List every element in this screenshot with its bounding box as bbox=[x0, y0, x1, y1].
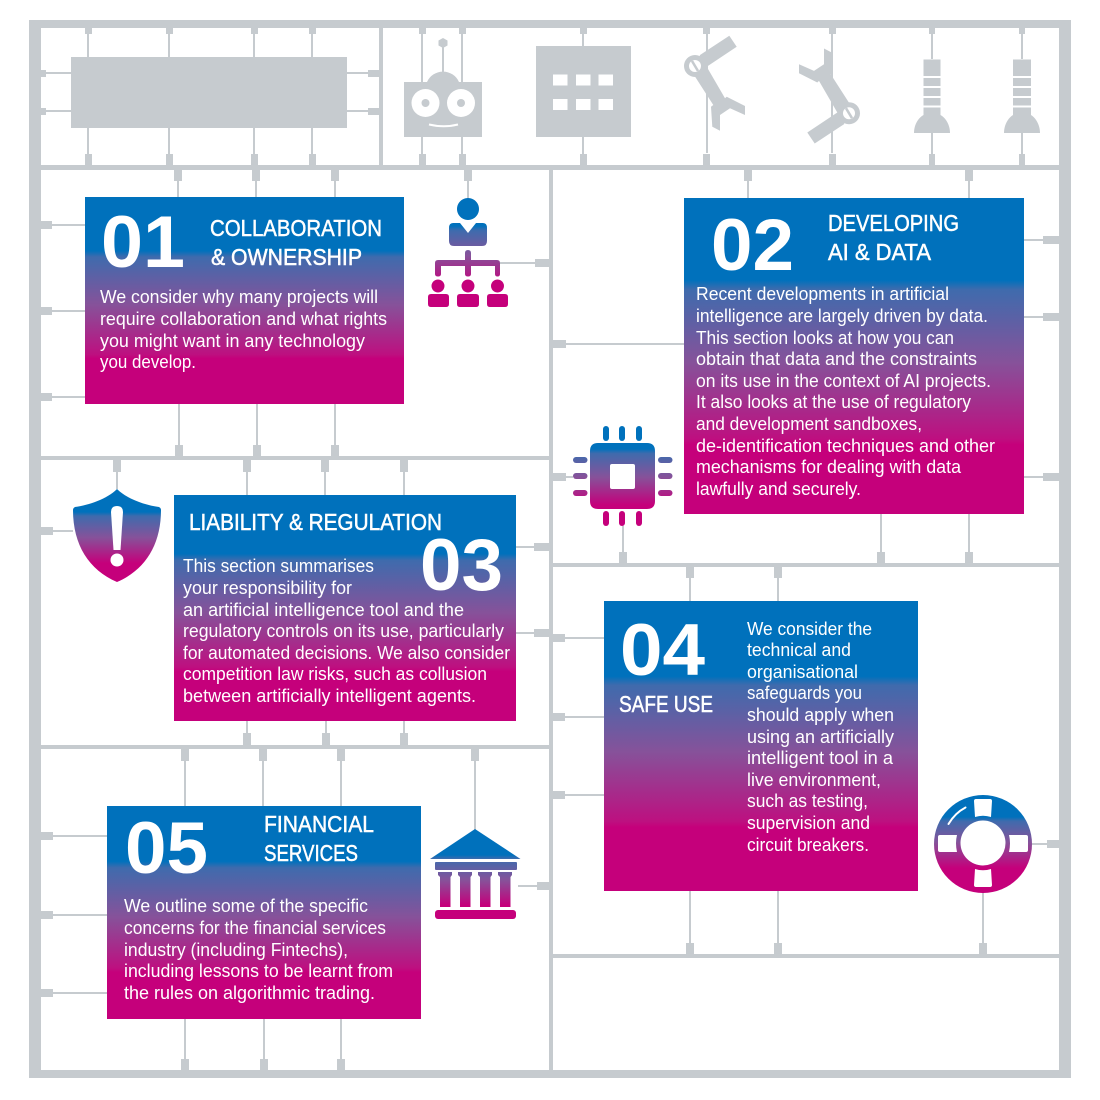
kit part: robot head bbox=[404, 38, 482, 137]
heading 05 bbox=[264, 811, 374, 866]
body text 04 bbox=[747, 619, 894, 855]
body text 02: lawfully and securely. bbox=[696, 479, 861, 499]
body text 03: for automated decisions. We also consider bbox=[183, 643, 510, 663]
body text 01: require collaboration and what rights bbox=[100, 309, 387, 329]
panel: 02 developing AI and data bbox=[684, 198, 1024, 514]
body text 04: organisational bbox=[747, 662, 858, 682]
kit part: robot arm right bbox=[799, 48, 860, 144]
body text 02: mechanisms for dealing with data bbox=[696, 457, 962, 477]
icon: organisation chart bbox=[428, 198, 508, 307]
heading 04: SAFE USE bbox=[619, 691, 713, 717]
heading 01: & OWNERSHIP bbox=[211, 244, 362, 270]
body text 04: supervision and bbox=[747, 813, 870, 833]
body text 04: circuit breakers. bbox=[747, 835, 869, 855]
number 05: 05 bbox=[125, 808, 208, 889]
body text 03: This section summarises bbox=[183, 556, 374, 576]
body text 03: an artificial intelligence tool and the bbox=[183, 600, 464, 620]
icon: lifebuoy bbox=[934, 795, 1032, 893]
body text 04: such as testing, bbox=[747, 791, 868, 811]
body text 04: live environment, bbox=[747, 770, 881, 790]
body text 05: concerns for the financial services bbox=[124, 918, 386, 938]
body text 01: you might want in any technology bbox=[100, 331, 365, 351]
body text 02: de-identification techniques and other bbox=[696, 436, 995, 456]
body text 02: obtain that data and the constraints bbox=[696, 349, 977, 369]
body text 03: your responsibility for bbox=[183, 578, 352, 598]
body text 01 bbox=[100, 287, 387, 372]
body text 04: safeguards you bbox=[747, 683, 862, 703]
body text 01: We consider why many projects will bbox=[100, 287, 378, 307]
heading 02: AI & DATA bbox=[828, 239, 932, 265]
panel: 01 collaboration and ownership bbox=[85, 197, 404, 404]
heading 03: LIABILITY & REGULATION bbox=[189, 509, 442, 535]
body text 02 bbox=[696, 284, 995, 499]
heading 05: SERVICES bbox=[264, 840, 358, 866]
body text 04: technical and bbox=[747, 640, 851, 660]
number 01: 01 bbox=[101, 202, 185, 283]
body text 02: Recent developments in artificial bbox=[696, 284, 949, 304]
heading 02: DEVELOPING bbox=[828, 210, 959, 236]
panel: 05 financial services bbox=[107, 806, 421, 1019]
body text 05 bbox=[124, 896, 393, 1003]
number 02: 02 bbox=[711, 205, 794, 286]
kit part: robot arm left bbox=[684, 36, 745, 131]
heading 01 bbox=[210, 215, 382, 270]
body text 04: should apply when bbox=[747, 705, 894, 725]
panel: 03 liability and regulation bbox=[174, 495, 516, 721]
body text 02: and development sandboxes, bbox=[696, 414, 922, 434]
body text 04: intelligent tool in a bbox=[747, 748, 894, 768]
heading 01: COLLABORATION bbox=[210, 215, 382, 241]
body text 02: on its use in the context of AI projects. bbox=[696, 371, 991, 391]
body text 04: using an artificially bbox=[747, 727, 894, 747]
body text 03: competition law risks, such as collusion bbox=[183, 664, 487, 684]
kit part: window panel bbox=[536, 46, 631, 137]
body text 02: This section looks at how you can bbox=[696, 328, 954, 348]
body text 03 bbox=[183, 556, 510, 706]
icon: microchip bbox=[573, 426, 672, 526]
icon: shield with exclamation mark bbox=[73, 489, 161, 582]
body text 05: We outline some of the specific bbox=[124, 896, 368, 916]
body text 05: industry (including Fintechs), bbox=[124, 940, 348, 960]
body text 05: the rules on algorithmic trading. bbox=[124, 983, 375, 1003]
body text 03: regulatory controls on its use, particularly bbox=[183, 621, 504, 641]
icon: bank building bbox=[430, 829, 520, 919]
body text 02: It also looks at the use of regulatory bbox=[696, 392, 971, 412]
body text 04: We consider the bbox=[747, 619, 872, 639]
kit part: blank title plate bbox=[71, 57, 347, 128]
number 04: 04 bbox=[620, 610, 705, 691]
number 03: 03 bbox=[420, 525, 503, 606]
heading 02 bbox=[828, 210, 959, 265]
kit part: bulb two bbox=[1004, 60, 1040, 133]
body text 03: between artificially intelligent agents. bbox=[183, 686, 476, 706]
body text 05: including lessons to be learnt from bbox=[124, 961, 393, 981]
body text 02: intelligence are largely driven by data. bbox=[696, 306, 988, 326]
kit part: bulb one bbox=[914, 60, 950, 133]
heading 05: FINANCIAL bbox=[264, 811, 374, 837]
panel: 04 safe use bbox=[604, 601, 918, 891]
body text 01: you develop. bbox=[100, 352, 196, 372]
